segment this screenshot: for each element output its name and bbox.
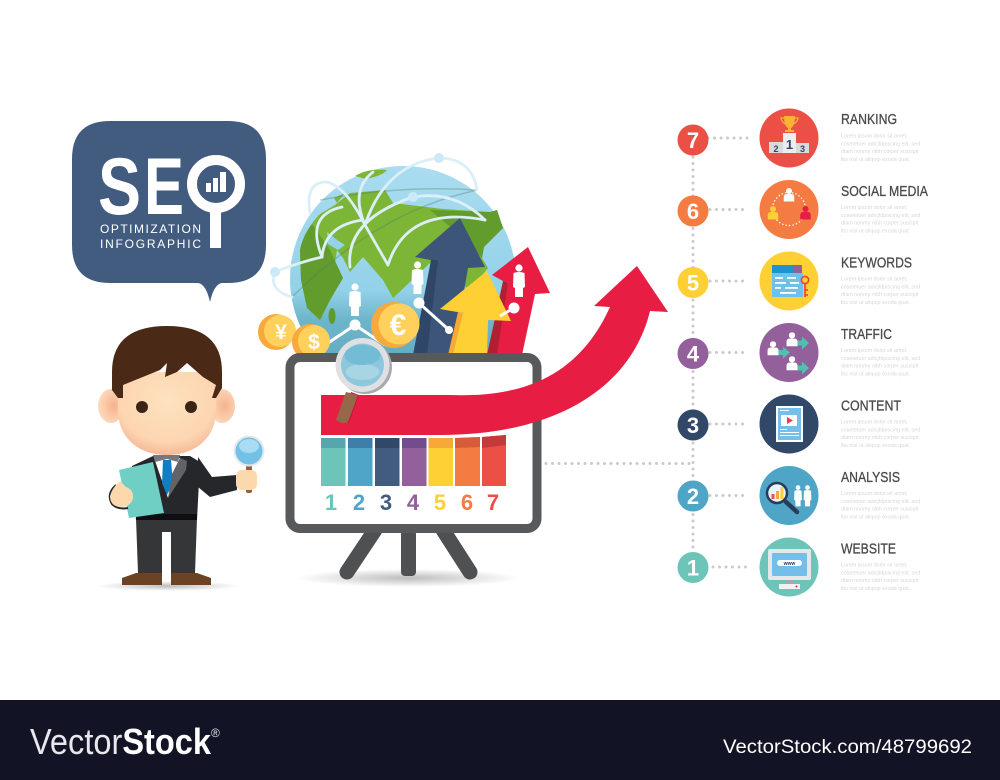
step 7: ranking	[678, 108, 920, 168]
island	[334, 193, 345, 203]
description: diam nonmy nibh corper suscipit	[841, 220, 919, 226]
footer bar	[0, 700, 1000, 780]
description: diam nonmy nibh corper suscipit	[841, 506, 919, 512]
eyes	[136, 401, 197, 413]
bar numbers: 1	[325, 490, 337, 515]
ocean	[290, 166, 516, 392]
lens highlight	[346, 364, 380, 380]
heading: KEYWORDS	[841, 254, 912, 272]
description: diam nonmy nibh corper suscipit	[841, 292, 919, 298]
step 6: social media	[678, 180, 928, 239]
description	[841, 562, 920, 592]
description	[841, 134, 920, 163]
description: lbs nisl ut aliquip exoda quat.	[841, 514, 910, 520]
description: lbs nisl ut aliquip exoda quat.	[841, 157, 910, 163]
coins	[258, 302, 420, 360]
ground shadow	[96, 581, 240, 591]
description	[841, 276, 920, 306]
handle shadow	[341, 392, 359, 423]
magnifier in hand	[234, 436, 264, 493]
character: businessman	[96, 326, 264, 591]
number 3	[678, 410, 708, 440]
coin: yen: ¥	[275, 321, 287, 344]
yellow arrow shade	[440, 309, 463, 355]
bar 5	[428, 438, 453, 486]
face	[118, 372, 216, 455]
step 3: content	[678, 394, 920, 454]
icon: computer monitor	[760, 538, 818, 596]
bar 6	[455, 437, 480, 486]
heading: ANALYSIS	[841, 469, 900, 486]
icon: people circle	[760, 180, 818, 239]
description	[841, 205, 920, 234]
bar numbers: 7	[487, 490, 499, 515]
lens top tint	[344, 345, 380, 365]
waist band	[136, 514, 197, 520]
icon: magnifier and people	[760, 466, 818, 525]
person icons	[349, 261, 525, 316]
step 2: analysis	[678, 466, 920, 525]
icon: podium and trophy	[760, 108, 818, 168]
big red growth arrow	[321, 266, 668, 435]
description: cosetetuer adicjfdpiscing elit, sed	[841, 570, 920, 576]
route nodes	[270, 153, 444, 277]
stock id: VectorStock.com/48799692	[723, 737, 972, 758]
number 1	[678, 552, 708, 583]
bar 4	[402, 438, 426, 486]
description: cosetetuer adicjfdpiscing elit, sed	[841, 356, 920, 362]
description: Lorem ipsum dolor sit amet,	[841, 134, 908, 140]
heading: SOCIAL MEDIA	[841, 183, 928, 200]
description: diam nonmy nibh corper suscipit	[841, 364, 919, 370]
bar numbers: 2	[353, 490, 365, 515]
number 2	[678, 480, 708, 512]
description: cosetetuer adicjfdpiscing elit, sed	[841, 213, 920, 219]
description: diam nonmy nibh corper suscipit	[841, 578, 919, 584]
description: Lorem ipsum dolor sit amet,	[841, 276, 908, 282]
number 6	[678, 196, 708, 226]
number 7	[678, 124, 708, 156]
bar 2	[348, 438, 372, 486]
board legs	[347, 530, 470, 572]
board frame	[290, 358, 537, 528]
center leg	[401, 530, 416, 576]
number 4	[678, 338, 708, 369]
Madagascar	[328, 308, 336, 324]
bar 7	[482, 435, 506, 486]
yellow arrow	[440, 271, 511, 355]
coin: euro: €	[390, 309, 407, 342]
number 5: 5	[687, 270, 699, 296]
red arrow	[487, 247, 550, 355]
collar	[153, 455, 180, 462]
hair	[112, 326, 222, 398]
speech bubble: SEO logo	[72, 121, 266, 302]
nodes	[350, 298, 520, 334]
bar 1	[321, 438, 346, 486]
Mediterranean	[327, 232, 345, 250]
hand	[236, 470, 257, 490]
dotted connectors	[546, 138, 750, 567]
grid shadow arcs	[292, 189, 478, 297]
red arrow shade	[487, 275, 508, 355]
step 4: traffic	[678, 323, 920, 382]
dark land facets	[300, 210, 503, 320]
description: cosetetuer adicjfdpiscing elit, sed	[841, 499, 920, 505]
icon: podium and trophy: 3	[800, 144, 805, 154]
description: Lorem ipsum dolor sit amet,	[841, 348, 908, 354]
coin: dollar	[292, 324, 330, 360]
description: lbs nisl ut aliquip exoda quat.	[841, 300, 910, 306]
description: cosetetuer adicjfdpiscing elit, sed	[841, 428, 920, 434]
coin: euro	[371, 302, 420, 348]
description: cosetetuer adicjfdpiscing elit, sed	[841, 284, 920, 290]
lens ring	[336, 338, 390, 392]
presentation board	[290, 358, 537, 587]
tie	[162, 460, 173, 495]
heading: WEBSITE	[841, 540, 896, 558]
colour bars	[321, 435, 506, 486]
description: diam nonmy nibh corper suscipit	[841, 435, 919, 441]
description: cosetetuer adicjfdpiscing elit, sed	[841, 142, 920, 148]
description: lbs nisl ut aliquip exoda quat.	[841, 586, 910, 592]
logo text: VectorStock	[30, 721, 212, 762]
arm	[198, 457, 237, 497]
bar numbers: 3	[380, 490, 392, 515]
description: Lorem ipsum dolor sit amet,	[841, 420, 908, 426]
SEO heading: E	[144, 142, 184, 232]
registered mark: ®	[211, 726, 220, 740]
step 1: website	[678, 538, 920, 596]
lapel	[168, 458, 187, 498]
coin: yen	[258, 314, 296, 350]
icon: tablet with video	[760, 394, 818, 454]
heading: RANKING	[841, 111, 897, 128]
footer background	[0, 700, 1000, 780]
subtitle line 2: INFOGRAPHIC	[100, 237, 201, 251]
navy arrow shade	[413, 257, 438, 355]
heading: TRAFFIC	[841, 326, 892, 343]
globe	[270, 153, 516, 392]
legs	[136, 518, 197, 573]
navy arrow	[413, 218, 485, 355]
description: Lorem ipsum dolor sit amet,	[841, 491, 908, 497]
people network	[325, 261, 525, 345]
description: lbs nisl ut aliquip exoda quat.	[841, 372, 910, 378]
description	[841, 348, 920, 378]
icon: podium and trophy: 1	[786, 137, 793, 152]
magnifier O with bars	[192, 160, 240, 248]
links	[325, 303, 514, 345]
number 1: 1	[687, 556, 699, 580]
Greenland	[355, 170, 387, 179]
lens glass	[341, 344, 384, 386]
description: lbs nisl ut aliquip exoda quat.	[841, 228, 910, 234]
cuff	[110, 485, 128, 508]
subtitle: OPTIMIZATION	[100, 222, 201, 236]
icon: browser and key	[760, 252, 818, 310]
description: Lorem ipsum dolor sit amet,	[841, 205, 908, 211]
clipboard	[119, 462, 164, 518]
shoes	[122, 573, 211, 585]
floor shadow	[296, 569, 520, 587]
SEO heading: S	[98, 142, 141, 232]
number 6: 6	[687, 199, 699, 224]
ears	[98, 389, 235, 423]
bar numbers: 5	[434, 490, 446, 515]
continents	[300, 190, 503, 320]
description: diam nonmy nibh corper suscipit	[841, 149, 919, 155]
icon: people and arrows	[760, 323, 818, 382]
SEO heading	[98, 142, 184, 232]
left hand	[110, 481, 133, 507]
jacket	[132, 456, 200, 520]
bar 3	[375, 438, 400, 486]
icon: computer monitor: www	[783, 561, 795, 567]
magnifying glass	[336, 338, 392, 423]
shirt	[154, 458, 180, 498]
rising arrows	[413, 218, 550, 355]
handle	[336, 392, 358, 423]
number 3: 3	[687, 413, 699, 438]
coin: dollar: $	[308, 331, 320, 354]
bar numbers	[325, 490, 499, 515]
number 4: 4	[687, 342, 700, 366]
step 5: keywords	[678, 252, 920, 310]
description: Lorem ipsum dolor sit amet,	[841, 562, 908, 568]
number 5	[678, 267, 708, 298]
number 2: 2	[687, 484, 699, 509]
description: lbs nisl ut aliquip exoda quat.	[841, 443, 910, 449]
bar numbers: 6	[461, 490, 473, 515]
description	[841, 491, 920, 520]
bar numbers: 4	[407, 490, 420, 515]
icon: podium and trophy: 2	[773, 144, 779, 154]
bubble shape	[72, 121, 266, 302]
lens shadow	[338, 340, 392, 394]
route arcs	[273, 158, 485, 297]
heading: CONTENT	[841, 398, 901, 414]
number 7: 7	[687, 128, 699, 153]
description	[841, 420, 920, 449]
